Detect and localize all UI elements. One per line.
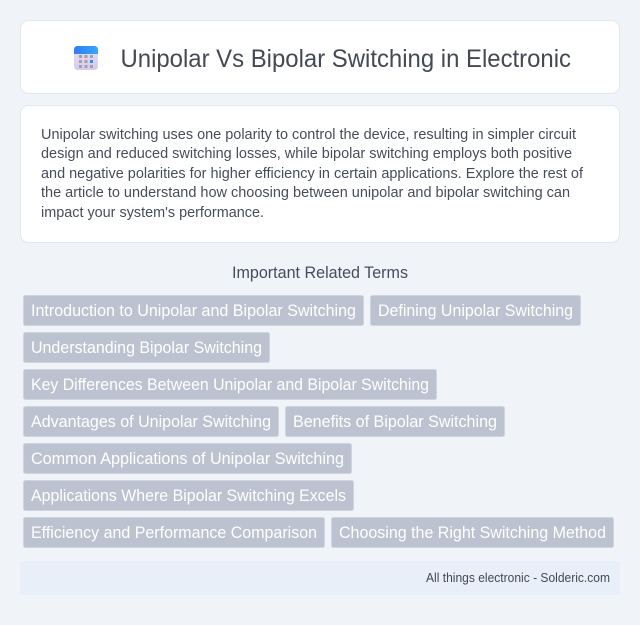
tag	[24, 406, 278, 436]
summary text: and negative polarities for higher efficiency in certain applications. Explore the rest of	[41, 166, 584, 182]
tag: Common Applications of Unipolar Switching	[31, 449, 344, 468]
summary text: Unipolar switching uses one polarity to control the device, resulting in simpler circuit	[41, 127, 576, 143]
tag: Understanding Bipolar Switching	[31, 338, 262, 357]
tag	[24, 370, 436, 400]
tag	[24, 518, 324, 548]
panel: summary	[20, 106, 620, 242]
tag: Defining Unipolar Switching	[378, 301, 573, 320]
tag	[24, 480, 354, 510]
tag	[286, 406, 504, 436]
tag list	[24, 296, 614, 548]
heading: important related terms: Important Related Terms	[232, 263, 408, 282]
title: Unipolar Vs Bipolar Switching in Electronic	[120, 45, 571, 73]
summary text: the article to understand how choosing between unipolar and bipolar switching can	[41, 185, 570, 201]
footer	[20, 561, 620, 595]
tag: Efficiency and Performance Comparison	[31, 523, 317, 542]
tag	[370, 296, 580, 326]
panel: title header	[20, 20, 620, 94]
tag: Choosing the Right Switching Method	[339, 523, 606, 542]
tag: Key Differences Between Unipolar and Bipolar Switching	[31, 375, 429, 394]
summary text: design and reduced switching losses, while bipolar switching employs both positive	[41, 146, 572, 162]
tag: Introduction to Unipolar and Bipolar Switching	[31, 301, 356, 320]
tag	[24, 444, 352, 474]
tag	[332, 518, 614, 548]
tag: Benefits of Bipolar Switching	[293, 412, 497, 431]
tag	[24, 332, 270, 362]
tag: Applications Where Bipolar Switching Excels	[31, 486, 346, 505]
tag	[24, 296, 364, 326]
summary text	[41, 127, 584, 221]
summary text: impact your system's performance.	[41, 205, 264, 221]
footer text: All things electronic - Solderic.com	[426, 571, 610, 585]
tag: Advantages of Unipolar Switching	[31, 412, 271, 431]
icon: calendar	[74, 46, 98, 70]
